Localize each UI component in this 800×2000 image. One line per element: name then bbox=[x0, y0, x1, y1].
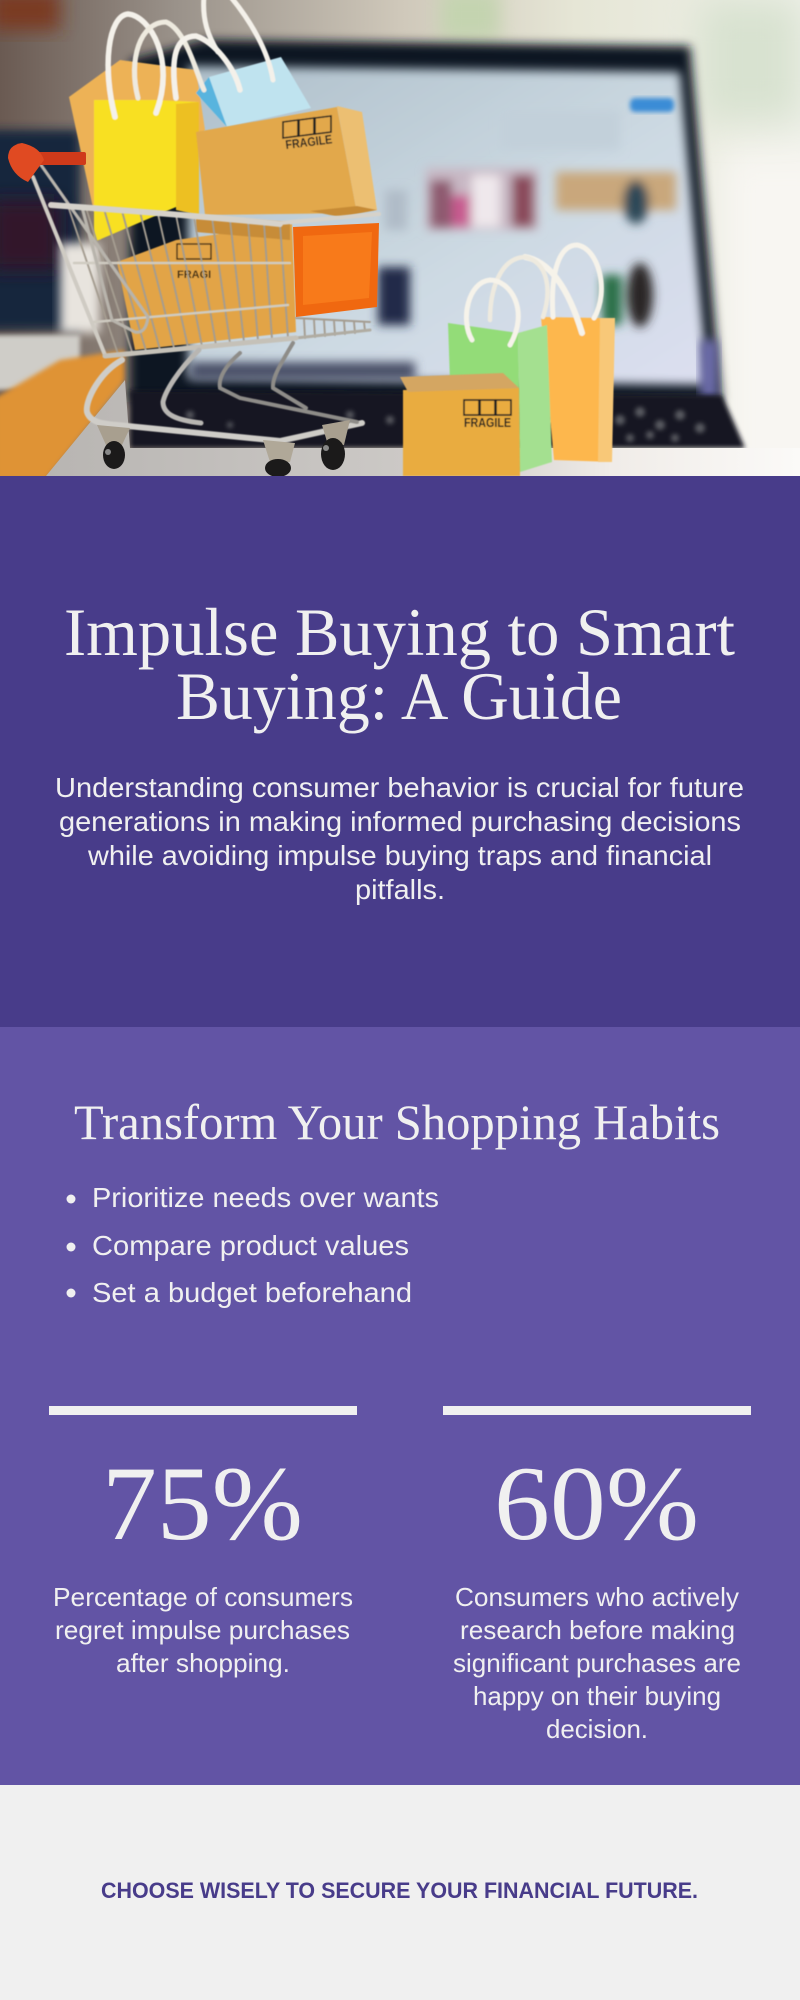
title bbox=[64, 594, 735, 734]
small fragile box: FRAGILE bbox=[464, 416, 511, 430]
stat: 60%: Consumers who actively bbox=[455, 1582, 739, 1612]
stat: 75%: Percentage of consumers bbox=[53, 1582, 353, 1612]
stat: 60%: significant purchases are bbox=[453, 1648, 741, 1678]
stat: 75% bbox=[49, 1406, 357, 1678]
photo background bbox=[0, 0, 800, 490]
bullet list: Set a budget beforehand bbox=[92, 1277, 412, 1308]
orange cart panel bbox=[293, 223, 379, 317]
cart contents: lower box: FRAGI bbox=[177, 269, 211, 281]
stat: 60%: decision. bbox=[546, 1714, 648, 1744]
intro text: generations in making informed purchasing decisions bbox=[59, 806, 741, 837]
bullet list: Compare product values bbox=[92, 1230, 409, 1261]
cart handle bbox=[8, 143, 86, 182]
gift bags on laptop bbox=[448, 245, 615, 472]
bullet list bbox=[66, 1182, 439, 1308]
intro text bbox=[55, 772, 744, 905]
cart wires bbox=[68, 206, 370, 354]
keyboard keys bbox=[186, 407, 705, 442]
fragile box in cart: FRAGILE bbox=[285, 132, 333, 152]
cart frame bbox=[87, 360, 362, 441]
laptop bbox=[46, 40, 800, 476]
heading: Transform Your Shopping Habits bbox=[74, 1094, 720, 1150]
title: Buying: A Guide bbox=[176, 658, 622, 734]
title: Impulse Buying to Smart bbox=[64, 594, 735, 670]
shopping bags in cart bbox=[69, 0, 311, 242]
stat: 60%: 60% bbox=[494, 1445, 699, 1562]
cart contents: lower box bbox=[117, 216, 296, 350]
stat: 75%: regret impulse purchases bbox=[55, 1615, 350, 1645]
intro text: while avoiding impulse buying traps and financial bbox=[87, 840, 712, 871]
panel: shopping habits and statistics bbox=[0, 1027, 800, 1785]
panel: closing call to action bbox=[0, 1785, 800, 2000]
intro text: Understanding consumer behavior is crucial for future bbox=[55, 772, 744, 803]
shopping cart bbox=[33, 165, 379, 441]
fragile icons bbox=[283, 116, 331, 138]
screen thumbnails bbox=[190, 168, 676, 380]
fragile box in cart bbox=[196, 106, 377, 217]
stat: 60% bbox=[443, 1406, 751, 1744]
bullet list: Prioritize needs over wants bbox=[92, 1182, 439, 1213]
stat: 75%: after shopping. bbox=[116, 1648, 290, 1678]
closing line: CHOOSE WISELY TO SECURE YOUR FINANCIAL FUTURE. bbox=[101, 1878, 698, 1903]
stat: 60%: happy on their buying bbox=[473, 1681, 721, 1711]
small fragile box bbox=[400, 373, 520, 476]
intro text: pitfalls. bbox=[355, 874, 445, 905]
hero photo: shopping cart and laptop bbox=[0, 0, 800, 490]
cart wheels bbox=[97, 420, 350, 477]
panel: intro bbox=[0, 476, 800, 1027]
stat: 75%: 75% bbox=[102, 1445, 303, 1562]
stat: 60%: research before making bbox=[460, 1615, 735, 1645]
